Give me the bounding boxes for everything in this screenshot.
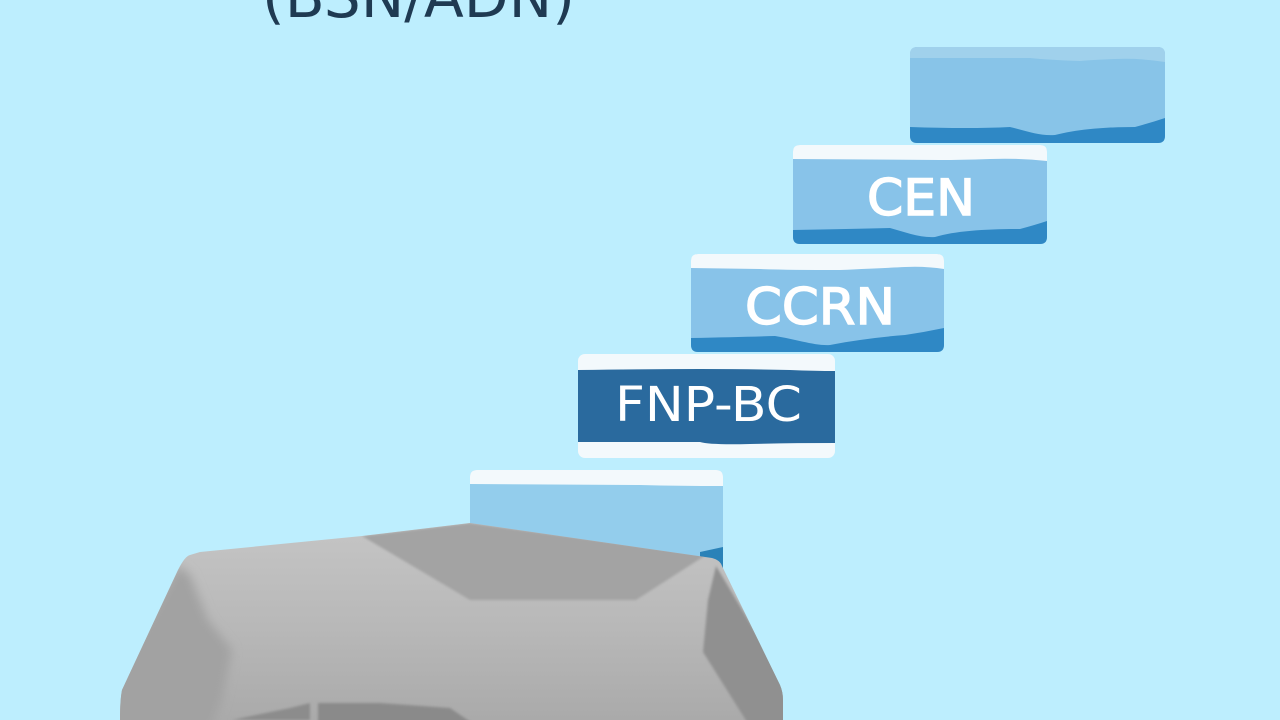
rock: lower recess left [232,703,310,720]
label: CCRN: CCRN [745,278,895,336]
rock: right shaded facet [703,566,790,720]
step: lowest block behind rock [470,470,723,580]
rock: top facet [362,523,706,600]
label: FNP-BC: FNP-BC [615,377,802,433]
rock: lower recess right [318,703,475,720]
rock: left shaded facet [120,566,232,720]
step: CEN [793,145,1047,244]
step: FNP-BC highlighted [578,354,835,458]
step: top blank block [910,47,1165,143]
step: CCRN [691,254,944,352]
label: CEN: CEN [867,169,975,227]
rock [100,515,800,720]
